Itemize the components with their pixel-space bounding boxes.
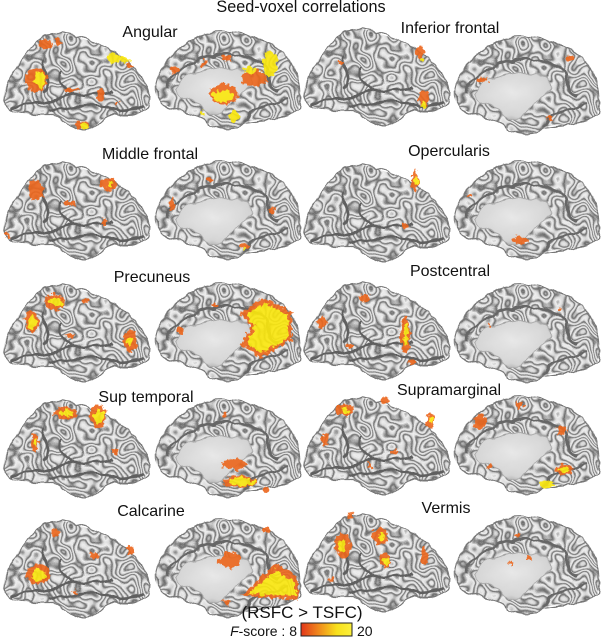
brain: Opercularis lateral: [303, 165, 450, 262]
heading: Calcarine: Calcarine: [117, 503, 185, 520]
colour bar: [301, 623, 352, 636]
panel: Vermis: [303, 500, 599, 614]
brain: Calcarine lateral: [3, 521, 150, 618]
panel: Supramarginal: [303, 382, 599, 495]
panel: Angular: [3, 24, 300, 130]
heading: Vermis: Vermis: [422, 500, 470, 517]
brain: Vermis lateral: [303, 513, 450, 612]
brain: Opercularis medial: [454, 162, 599, 259]
brain: Calcarine medial: [155, 520, 300, 617]
brain: Vermis medial: [454, 517, 599, 614]
legend max: 20: [357, 623, 373, 639]
panel: Inferior frontal: [303, 20, 599, 134]
brain: Precuneus lateral: [3, 285, 150, 382]
legend: [230, 603, 373, 639]
brain: Sup temporal lateral: [3, 401, 150, 498]
brain: Inferior frontal lateral: [303, 29, 450, 126]
brain: Supramarginal lateral: [303, 397, 450, 495]
panel: Opercularis: [303, 143, 599, 262]
brain: Angular medial: [155, 32, 300, 129]
brain: Middle frontal medial: [155, 162, 300, 259]
panel: Calcarine: [3, 503, 300, 618]
panel: Sup temporal: [3, 389, 300, 498]
panel: Middle frontal: [3, 146, 300, 260]
brain: Supramarginal medial: [454, 397, 599, 494]
heading: Middle frontal: Middle frontal: [102, 146, 198, 163]
panel: Postcentral: [303, 263, 599, 382]
brain: Sup temporal medial: [155, 400, 300, 497]
legend title: (RSFC > TSFC): [241, 603, 363, 622]
heading: Angular: Angular: [122, 24, 178, 41]
brain: Middle frontal lateral: [3, 163, 150, 260]
brain: Angular lateral: [3, 33, 150, 130]
brain: Inferior frontal medial: [454, 37, 599, 134]
brain: Precuneus medial: [155, 284, 300, 381]
heading: Sup temporal: Sup temporal: [98, 389, 194, 406]
heading: Precuneus: Precuneus: [114, 269, 190, 286]
heading: Inferior frontal: Inferior frontal: [401, 20, 499, 37]
panel: Precuneus: [3, 269, 300, 382]
legend label: F-score : 8: [230, 623, 297, 639]
heading: Opercularis: Opercularis: [408, 143, 490, 160]
brain: Postcentral lateral: [303, 283, 450, 380]
heading: Supramarginal: Supramarginal: [397, 382, 501, 399]
heading: Postcentral: Postcentral: [410, 263, 490, 280]
brain: Postcentral medial: [454, 285, 599, 382]
